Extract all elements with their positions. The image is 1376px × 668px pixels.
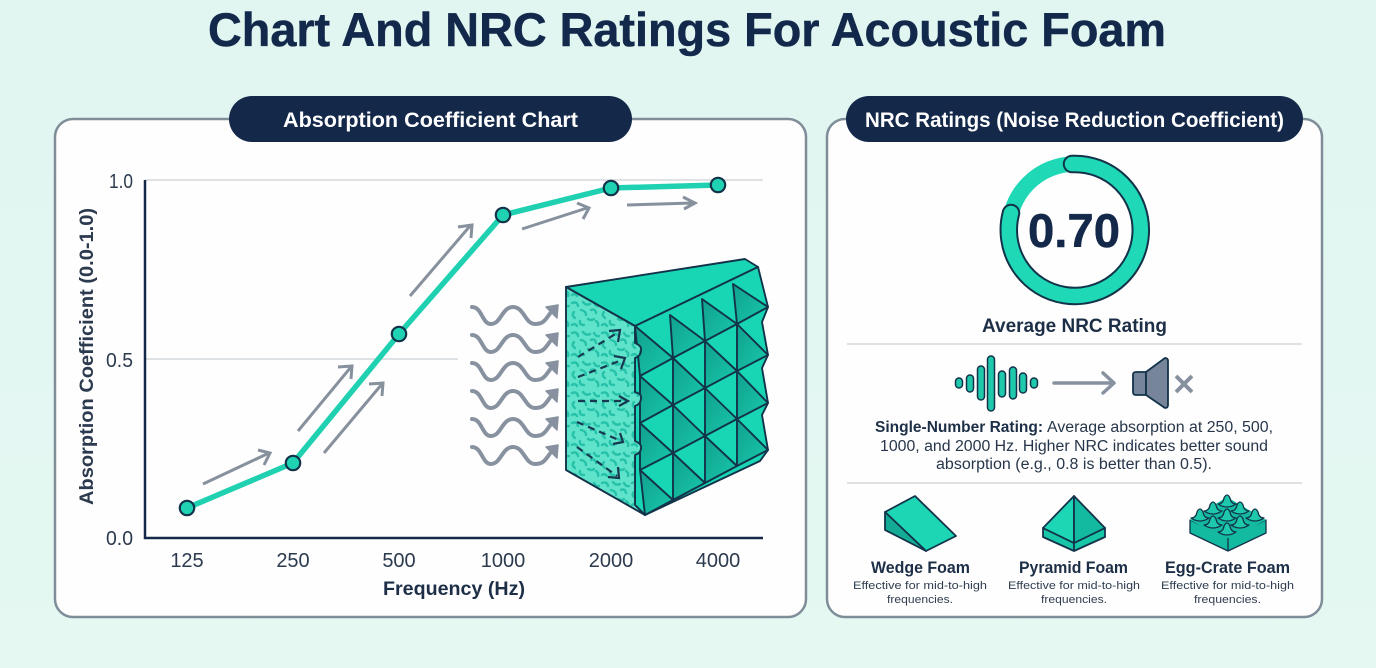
y axis labels: 1.0: [109, 171, 133, 193]
icon: wedge foam: [885, 496, 956, 551]
foam type: pyramid: frequencies.: [1041, 594, 1107, 606]
trend arrows: [203, 197, 695, 484]
x axis labels: 250: [276, 550, 310, 572]
icon: waveform: [956, 356, 1038, 411]
icon: pyramid foam: [1043, 496, 1105, 551]
foam type: wedge: Wedge Foam: [871, 559, 970, 577]
illustration: sound waves entering acoustic foam: [472, 259, 768, 515]
y axis labels: [106, 171, 133, 550]
NRC explanation text: [875, 419, 1273, 473]
x axis title: Frequency (Hz): [383, 579, 525, 600]
foam type: egg-crate: Egg-Crate Foam: [1165, 559, 1290, 577]
x axis labels: 2000: [589, 550, 633, 572]
y axis title: Absorption Coefficient (0.0-1.0): [77, 208, 98, 505]
icon: muted speaker: [1133, 358, 1192, 408]
NRC explanation text: 1000, and 2000 Hz. Higher NRC indicates better sound: [880, 438, 1268, 455]
title: Chart And NRC Ratings For Acoustic Foam: [208, 3, 1166, 56]
panel heading: NRC ratings: [846, 96, 1303, 142]
foam type: wedge: [853, 496, 987, 606]
data line: [187, 185, 718, 508]
x axis labels: 1000: [481, 550, 525, 572]
line chart: [77, 171, 763, 600]
foam type: egg-crate: frequencies.: [1194, 594, 1261, 606]
foam type: pyramid: Effective for mid-to-high: [1008, 580, 1140, 592]
x axis labels: 125: [170, 550, 204, 572]
NRC explanation text: absorption (e.g., 0.8 is better than 0.5).: [936, 456, 1212, 473]
foam top face: [566, 259, 758, 326]
foam type: egg-crate: Effective for mid-to-high: [1161, 580, 1294, 592]
arrow: waveform to speaker: [1054, 373, 1114, 393]
NRC explanation text: Single-Number Rating:: [875, 419, 1043, 436]
foam type: pyramid: [1008, 496, 1140, 606]
foam porous cross-section: [566, 287, 645, 515]
NRC gauge ring: [1009, 164, 1141, 296]
gauge caption: Average NRC Rating: [982, 316, 1167, 337]
foam type: wedge: Effective for mid-to-high: [853, 580, 987, 592]
x axis labels: 500: [382, 550, 416, 572]
sound waves: [472, 305, 558, 464]
y axis labels: 0.5: [106, 350, 133, 372]
NRC value: 0.70: [1028, 204, 1120, 257]
icon: egg-crate foam: [1190, 495, 1266, 551]
data points: [180, 178, 725, 515]
NRC explanation text: Average absorption at 250, 500,: [1047, 419, 1273, 436]
foam type: pyramid: Pyramid Foam: [1019, 559, 1128, 577]
panel heading: absorption coefficient chart: Absorption Coefficient Chart: [283, 109, 578, 132]
foam type: egg-crate: [1161, 495, 1294, 606]
panel heading: NRC ratings: NRC Ratings (Noise Reduction Coefficient): [865, 109, 1284, 132]
panel: NRC ratings: [827, 96, 1322, 617]
absorbed sound dashed arrows: [577, 330, 628, 478]
x axis labels: [170, 550, 740, 572]
foam pyramid face: [635, 267, 768, 515]
panel heading: absorption coefficient chart: [229, 96, 632, 142]
x axis labels: 4000: [696, 550, 740, 572]
foam block: [566, 259, 768, 515]
panel: absorption coefficient chart: [55, 96, 806, 617]
foam type: wedge: frequencies.: [887, 594, 953, 606]
y axis labels: 0.0: [106, 528, 133, 550]
